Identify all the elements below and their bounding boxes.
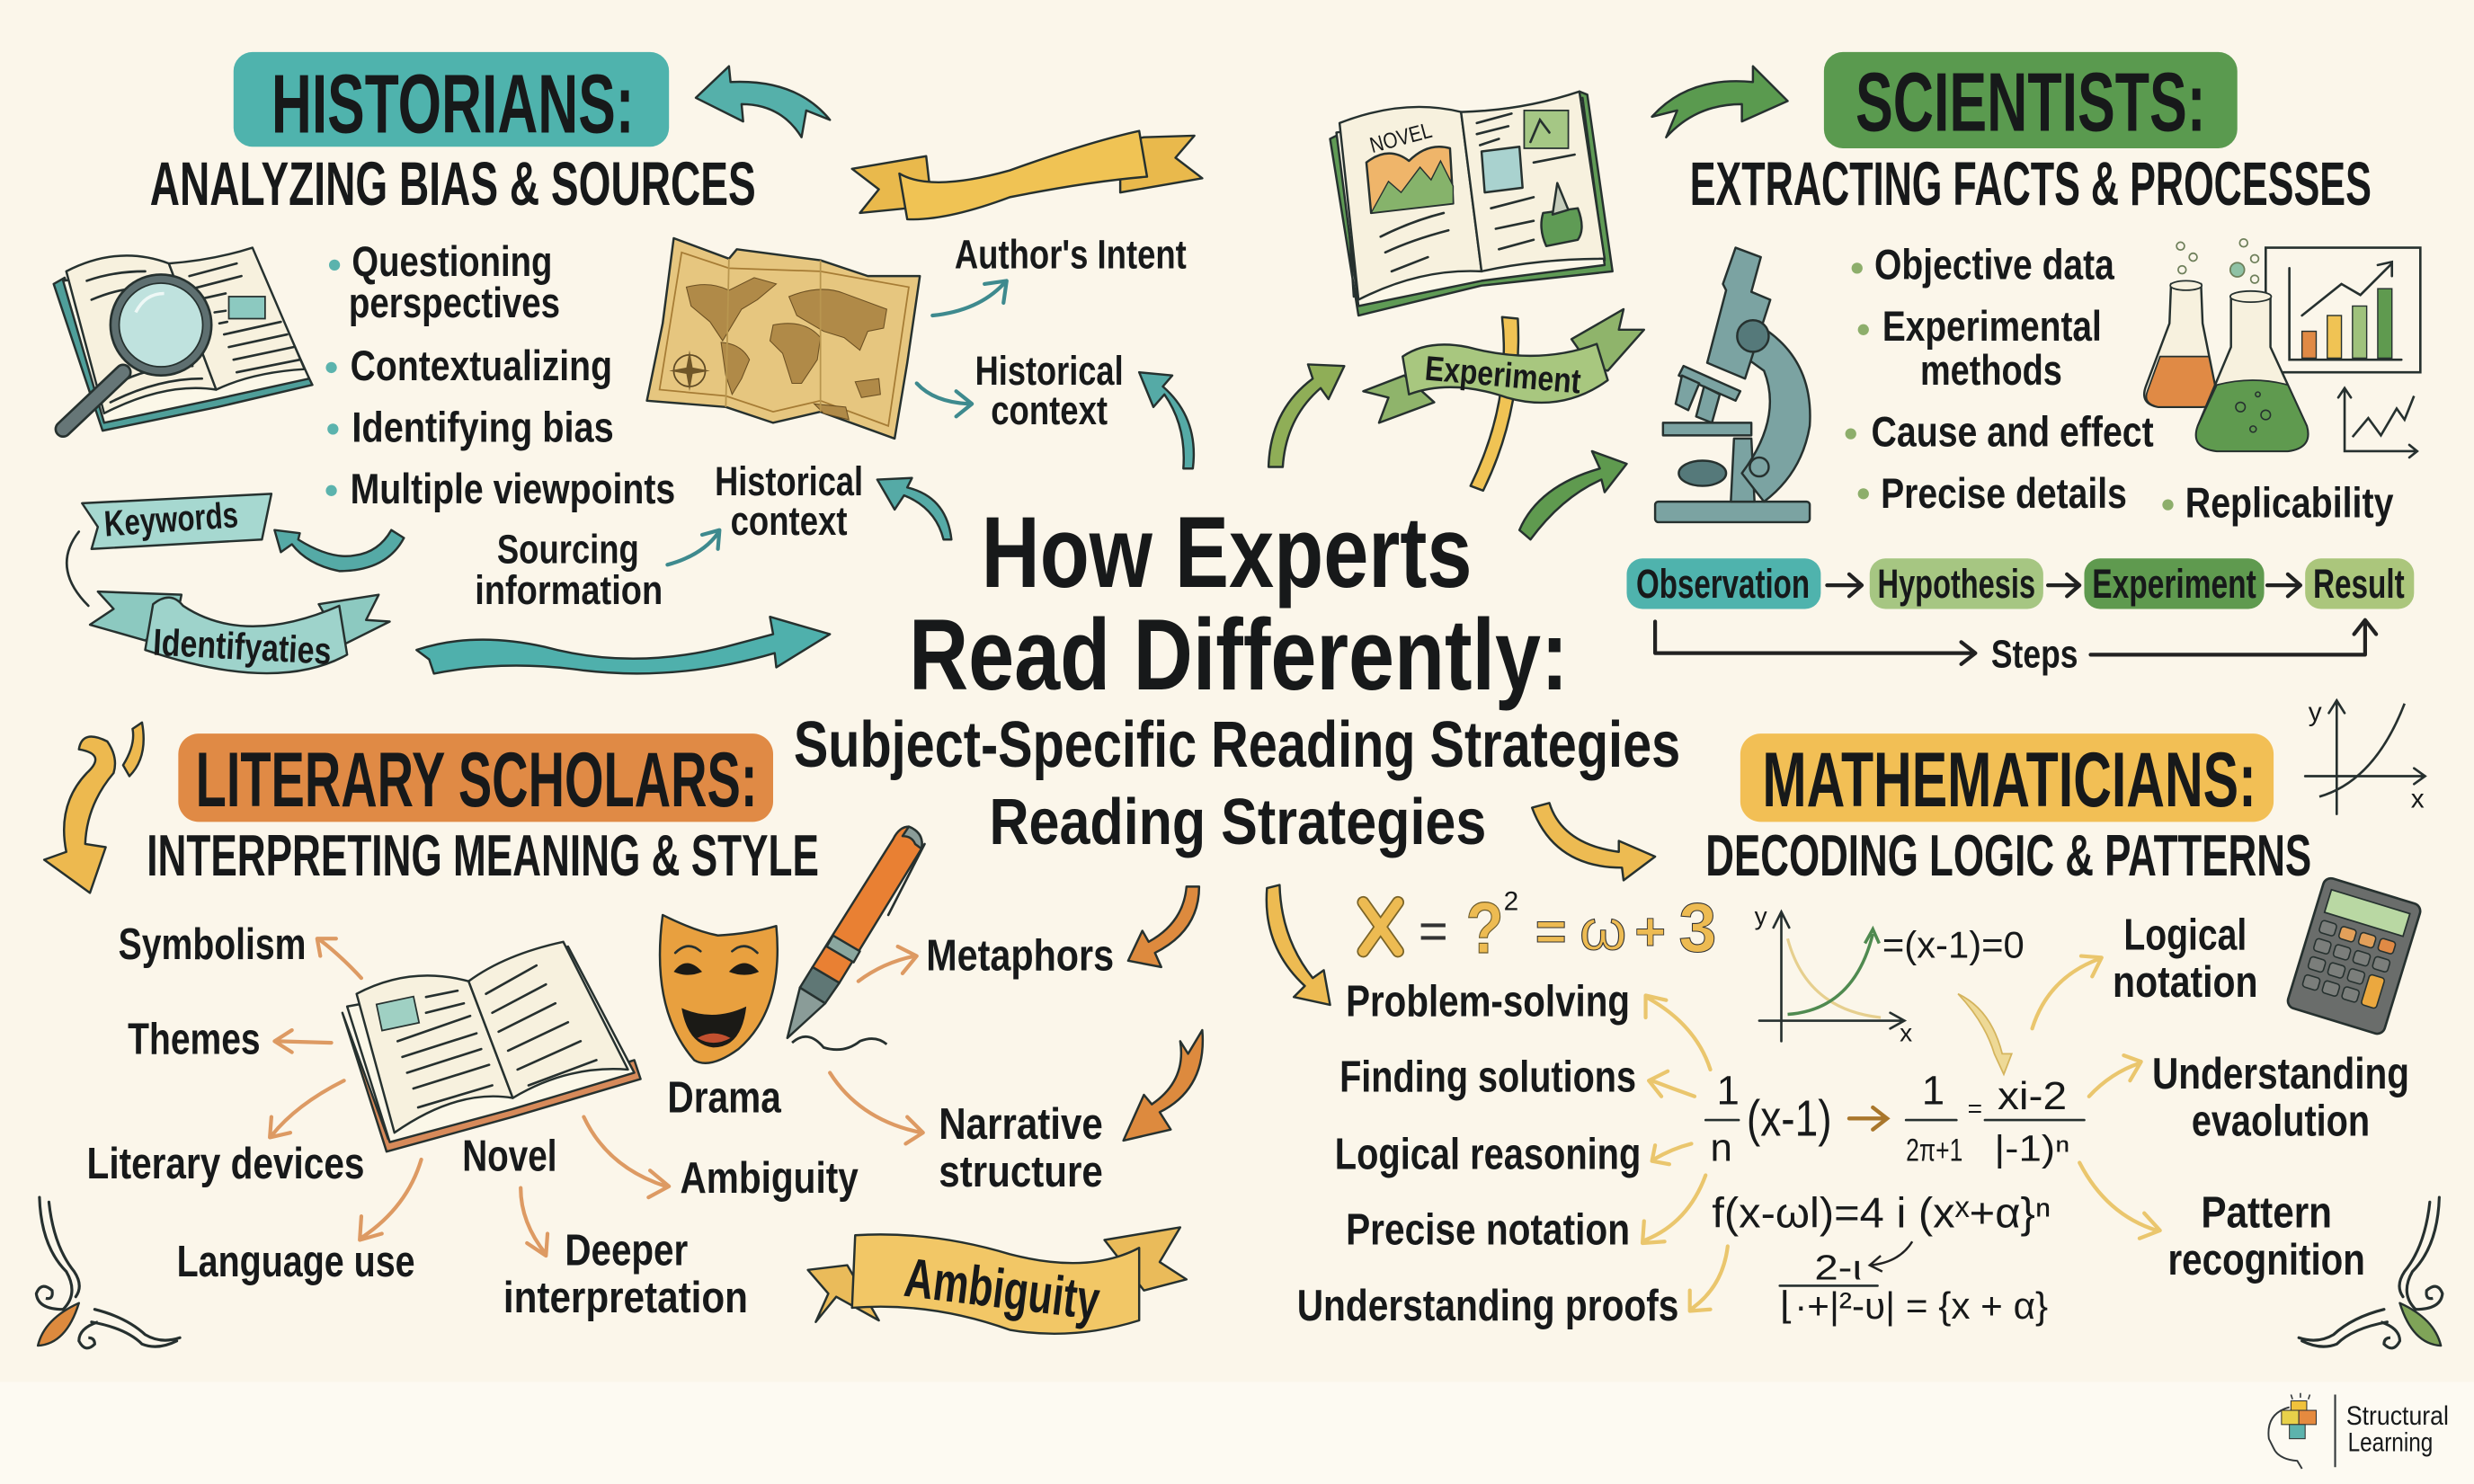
heading: literary scholars: LITERARY SCHOLARS: <box>196 737 757 823</box>
banner: experiment ribbon with pencil: Experiment <box>1423 350 1582 402</box>
label: sourcing information: information <box>475 567 663 613</box>
panel: historians <box>54 52 1202 673</box>
equations: formulas: f(x-ωl)=4 i (xˣ+α}ⁿ <box>1712 1189 2051 1237</box>
equation: x equals: = <box>1535 902 1567 962</box>
bullet list: scientists: Objective data <box>1874 242 2114 289</box>
label: logical notation: Logical <box>2123 911 2247 960</box>
label: historical context right: Historical <box>975 348 1124 394</box>
heading: mathematicians <box>1740 733 2274 823</box>
equations: formulas: = <box>1968 1095 1982 1123</box>
title <box>909 495 1569 711</box>
labels: math skills <box>1297 977 2409 1330</box>
equations: formulas: 1 <box>1922 1068 1944 1114</box>
equations: formulas: (x-1) <box>1747 1090 1832 1147</box>
chart: curves <box>1755 902 2025 1046</box>
labels: literary terms: Novel <box>462 1132 557 1180</box>
heading: scientists: SCIENTISTS: <box>1856 56 2206 149</box>
equations: formulas: n <box>1711 1126 1732 1170</box>
labels: literary terms: Themes <box>128 1015 261 1063</box>
flowchart: observation to result: Hypothesis <box>1878 561 2035 607</box>
bullet list: historians: Multiple viewpoints <box>351 466 675 513</box>
label: logical notation <box>2113 911 2258 1007</box>
labels: literary terms: Drama <box>667 1073 781 1122</box>
subtitle: Reading Strategies <box>989 786 1486 858</box>
heading: literary scholars <box>178 733 773 823</box>
ornament: left corner <box>36 1197 180 1348</box>
label: historical context right: context <box>991 387 1108 433</box>
bullet list: historians <box>325 238 675 513</box>
equation: x equals: 2 <box>1504 887 1518 917</box>
label: historical context left <box>715 458 863 544</box>
labels: math skills: Logical reasoning <box>1335 1131 1641 1179</box>
equation: x equals: 3 <box>1678 889 1717 966</box>
heading: mathematicians: MATHEMATICIANS: <box>1762 737 2256 823</box>
subtitle <box>794 709 1680 858</box>
subheading: historians: ANALYZING BIAS & SOURCES <box>150 149 756 218</box>
connector: curved line <box>67 531 88 606</box>
labels: math skills: evaolution <box>2192 1097 2370 1146</box>
labels: math skills: Understanding <box>2152 1050 2409 1098</box>
label: author's intent: Author's Intent <box>955 231 1187 277</box>
equations: formulas: 2-ι <box>1814 1249 1862 1287</box>
panel: mathematicians <box>1267 698 2443 1348</box>
labels: literary terms: interpretation <box>503 1274 748 1322</box>
icon: book with magnifier <box>54 248 313 431</box>
equation: x equals <box>1363 887 1717 969</box>
icon: axes top right: x <box>2411 785 2425 814</box>
subheading: literary scholars: INTERPRETING MEANING & STYLE <box>147 822 819 888</box>
icon: axes top right <box>2305 698 2425 814</box>
label: historical context right <box>975 348 1124 433</box>
label: historical context left: Historical <box>715 458 863 504</box>
icon: novel book: NOVEL <box>1367 119 1435 158</box>
icon: calculator <box>2286 876 2422 1035</box>
chart: curves: x <box>1900 1018 1912 1046</box>
labels: literary terms: Narrative <box>939 1100 1103 1149</box>
subtitle: Subject-Specific Reading Strategies <box>794 709 1680 781</box>
banner: ambiguity ribbon: Ambiguity <box>901 1247 1103 1332</box>
arrows: thin orange <box>270 938 923 1256</box>
equations: formulas: |-1)ⁿ <box>1994 1128 2070 1169</box>
ribbon: identifyaties: Identifyaties <box>152 621 333 672</box>
bullet list: scientists: Cause and effect <box>1872 409 2154 457</box>
title: Read Differently: <box>909 598 1569 711</box>
labels: literary terms: Metaphors <box>926 931 1114 980</box>
labels: math skills: Problem-solving <box>1346 977 1630 1026</box>
icon: microscope <box>1655 248 1810 522</box>
banner: yellow ribbon <box>852 131 1202 219</box>
arrows: thin teal <box>667 280 1007 564</box>
equation: x equals: = <box>1419 902 1448 959</box>
bullet list: historians: perspectives <box>349 280 560 327</box>
label: sourcing information: Sourcing <box>497 527 639 573</box>
logo: structural learning: Structural <box>2346 1401 2449 1431</box>
bullet list: historians: Identifying bias <box>352 404 614 451</box>
bullet list: scientists: Precise details <box>1881 470 2127 518</box>
bullet list: historians: Contextualizing <box>351 342 612 390</box>
arrow: green to heading <box>1652 67 1788 138</box>
label: sourcing information <box>475 527 663 613</box>
bullet list: scientists: methods <box>1920 347 2062 395</box>
equations: formulas: 2π+1 <box>1906 1133 1962 1169</box>
ribbon: keywords: Keywords <box>102 493 239 545</box>
labels: literary terms: Language use <box>177 1238 415 1286</box>
labels: math skills: Understanding proofs <box>1297 1282 1678 1330</box>
heading: historians <box>234 52 669 150</box>
arrow: teal to heading <box>696 67 830 138</box>
flowchart: steps loop <box>1655 620 2376 676</box>
flowchart: steps loop: Steps <box>1991 632 2078 676</box>
icon: axes top right: y <box>2309 698 2322 727</box>
icon: mini line chart <box>2338 388 2417 458</box>
labels: literary terms <box>87 920 1114 1322</box>
title: How Experts <box>982 495 1473 609</box>
heading: scientists <box>1824 52 2238 149</box>
equations: formulas: xi-2 <box>1998 1074 2067 1118</box>
labels: literary terms: Ambiguity <box>680 1154 859 1203</box>
labels: math skills: Precise notation <box>1346 1206 1630 1255</box>
bullet list: historians: Questioning <box>352 238 552 286</box>
arrows: tapered yellow <box>1267 803 1655 1005</box>
labels: literary terms: Symbolism <box>119 920 307 969</box>
equation: x equals: ? <box>1465 888 1504 969</box>
labels: literary terms: structure <box>939 1148 1103 1196</box>
arrows: green to microscope <box>1268 364 1627 539</box>
flowchart: observation to result: Experiment <box>2092 561 2256 607</box>
flowchart: observation to result <box>1627 558 2414 609</box>
bullet list: scientists <box>1846 242 2394 528</box>
equations: formulas: ⌊·+|²-υ| = {x + α} <box>1780 1284 2048 1327</box>
labels: math skills: recognition <box>2167 1236 2365 1284</box>
icon: novel book <box>1330 92 1613 315</box>
icon: open book <box>343 942 641 1151</box>
flowchart: observation to result: Result <box>2313 561 2405 607</box>
chart: curves: y <box>1755 902 1767 929</box>
bullet list: scientists: Replicability <box>2185 480 2394 528</box>
panel: scientists <box>1268 52 2420 676</box>
arrows: tapered orange <box>1124 886 1203 1141</box>
chart: curves: =(x-1)=0 <box>1882 923 2025 965</box>
labels: literary terms: Literary devices <box>87 1140 364 1188</box>
labels: math skills: Pattern <box>2201 1188 2332 1237</box>
ornament: right corner <box>2299 1197 2443 1348</box>
labels: literary terms: Deeper <box>565 1227 688 1275</box>
labels: math skills: Finding solutions <box>1339 1053 1636 1102</box>
arrow: yellow squiggle <box>44 723 144 893</box>
arrows: tapered teal <box>274 372 1194 571</box>
ribbon: identifyaties <box>90 591 390 673</box>
icon: flasks with bubbles <box>2144 239 2308 451</box>
equation: x equals: ω <box>1580 900 1627 963</box>
heading: historians: HISTORIANS: <box>271 57 635 150</box>
logo: structural learning <box>2268 1393 2449 1469</box>
arrows: thin yellow <box>1642 956 2160 1311</box>
equations: formulas <box>1705 1068 2084 1327</box>
icon: drama mask <box>660 915 778 1063</box>
icon: bar chart with trend <box>2265 248 2420 372</box>
panel: literary scholars <box>36 723 1203 1348</box>
icon: fountain pen <box>788 827 924 1050</box>
equation: x equals: + <box>1634 902 1666 962</box>
icon: world map <box>647 238 920 439</box>
label: logical notation: notation <box>2113 958 2258 1007</box>
bullet list: scientists: Experimental <box>1882 303 2102 351</box>
flowchart: observation to result: Observation <box>1636 561 1810 607</box>
arrow: pale yellow <box>1958 994 2012 1074</box>
arrow: big teal to title <box>416 617 830 673</box>
banner: ambiguity ribbon <box>808 1227 1187 1334</box>
label: historical context left: context <box>731 498 847 544</box>
equations: formulas: 1 <box>1717 1068 1740 1114</box>
banner: experiment ribbon with pencil <box>1363 309 1644 491</box>
logo: structural learning: Learning <box>2348 1428 2433 1458</box>
